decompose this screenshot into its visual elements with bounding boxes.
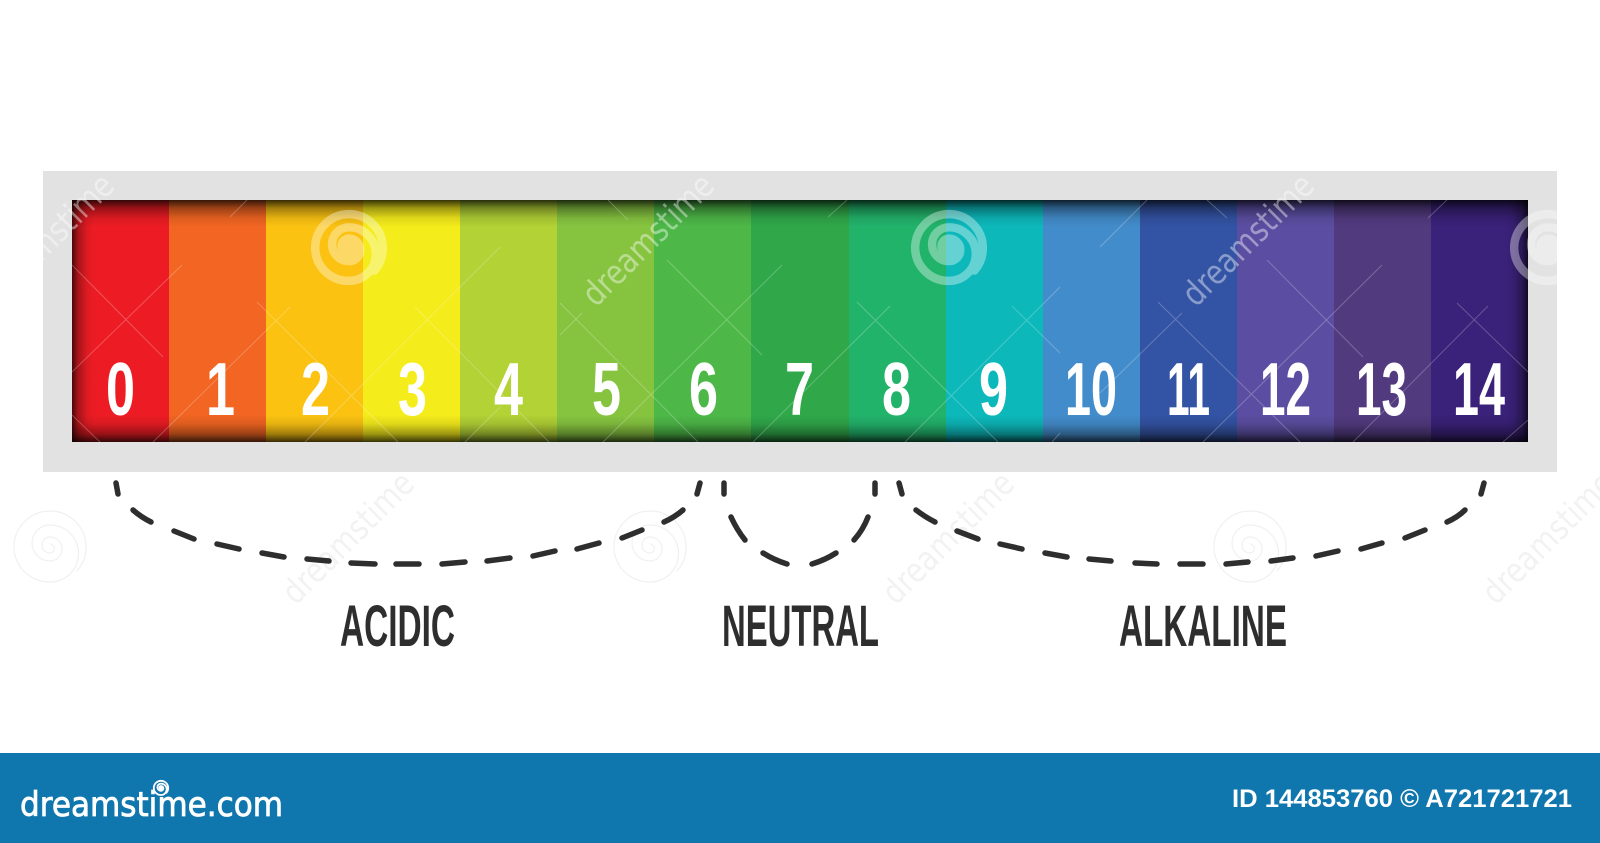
footer band [0, 753, 1600, 843]
acidic dashed bracket [116, 483, 700, 564]
color bar: pH segments 0 to 14 [72, 200, 1528, 442]
footer logo spiral icon [154, 781, 168, 795]
neutral dashed bracket [724, 483, 875, 564]
pH numbers 0 to 14: 14 [1453, 347, 1505, 431]
pH numbers 0 to 14: 6 [689, 347, 718, 431]
pH numbers 0 to 14: 11 [1167, 347, 1210, 431]
pH numbers 0 to 14: 7 [785, 347, 814, 431]
pH numbers 0 to 14: 12 [1260, 347, 1311, 431]
panel: grey scale frame [43, 171, 1557, 472]
pH numbers 0 to 14: 0 [106, 347, 135, 431]
pH numbers 0 to 14: 5 [592, 347, 621, 431]
watermark overlay: dreamstime [1174, 166, 1323, 314]
pH numbers 0 to 14: 3 [398, 347, 427, 431]
watermark overlay: dreamstime [874, 464, 1023, 612]
label: acidic: ACIDIC [340, 594, 455, 659]
footer image id and author: ID 144853760 © A721721721 [1232, 785, 1572, 813]
pH numbers 0 to 14 [106, 347, 1505, 431]
pH numbers 0 to 14: 9 [979, 347, 1008, 431]
watermark overlay [0, 166, 1600, 612]
inner shadow of the color bar [72, 200, 1528, 442]
pH numbers 0 to 14: 4 [494, 347, 523, 431]
label: neutral: NEUTRAL [722, 594, 879, 659]
watermark overlay: dreamstime [574, 166, 723, 314]
alkaline dashed bracket [899, 483, 1484, 564]
watermark overlay: dreamstime [274, 464, 423, 612]
pH numbers 0 to 14: 2 [301, 347, 330, 431]
pH numbers 0 to 14: 8 [882, 347, 911, 431]
label: alkaline: ALKALINE [1119, 594, 1287, 659]
footer logo text: dreamstime.com [20, 785, 283, 825]
pH numbers 0 to 14: 10 [1065, 347, 1117, 431]
pH numbers 0 to 14: 13 [1356, 347, 1407, 431]
pH numbers 0 to 14: 1 [206, 347, 235, 431]
